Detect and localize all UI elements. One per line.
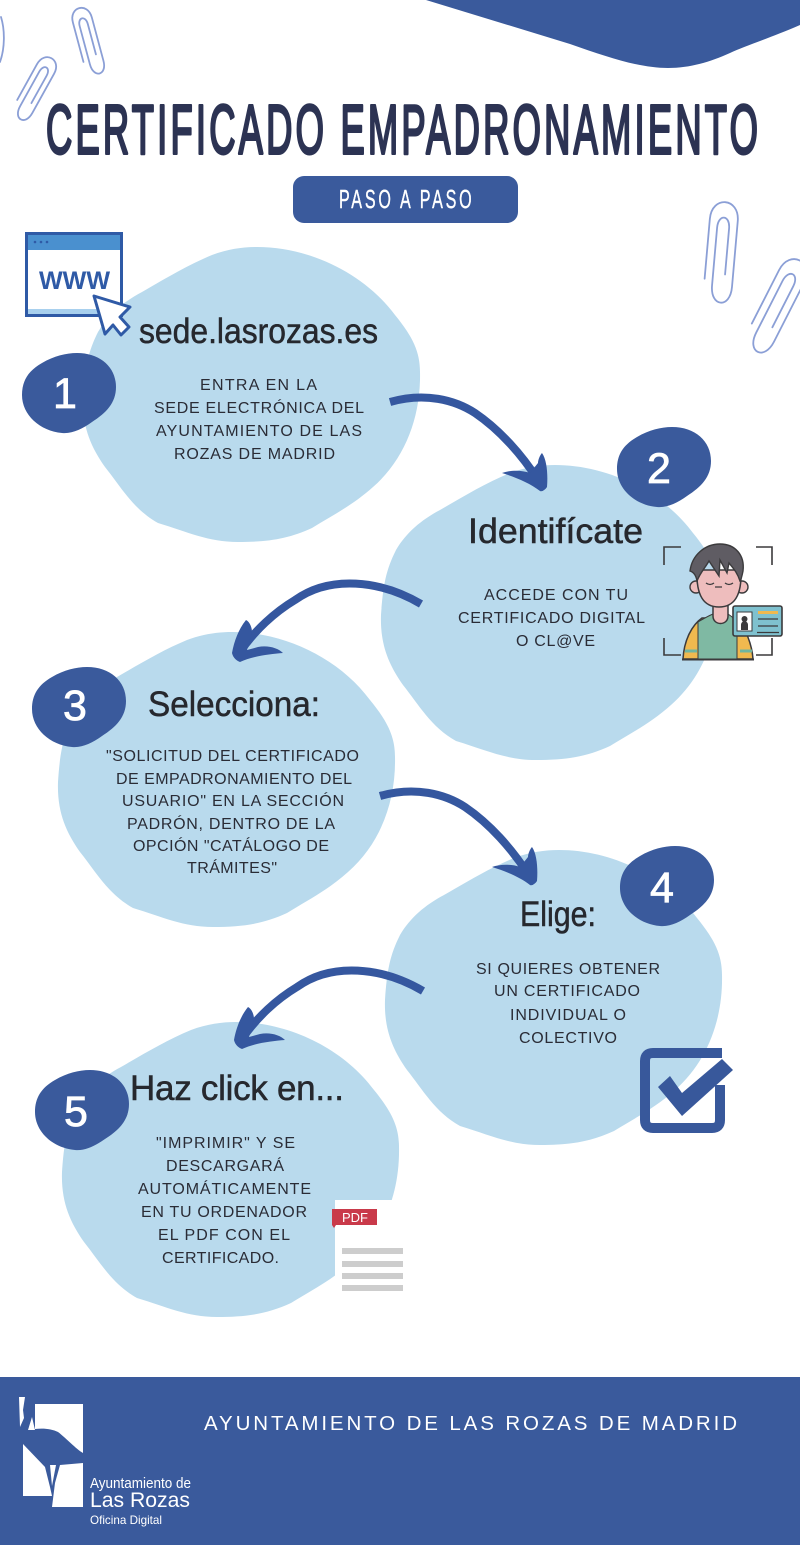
blob 1 <box>83 247 420 542</box>
heading 3: Selecciona: <box>148 685 320 724</box>
text 4: COLECTIVO <box>519 1030 617 1047</box>
logo text: Ayuntamiento de <box>90 1476 191 1492</box>
logo text: Las Rozas <box>90 1489 190 1512</box>
text 2: ACCEDE CON TU <box>484 587 628 604</box>
blob 4 <box>385 850 722 1145</box>
icon: www browser window: WWW <box>39 267 110 295</box>
text 3 <box>106 748 359 877</box>
text 1 <box>154 377 364 463</box>
text 3: PADRÓN, DENTRO DE LA <box>127 814 335 833</box>
text 1: AYUNTAMIENTO DE LAS <box>156 423 362 440</box>
heading 4: Elige: <box>520 895 596 934</box>
text 5: EL PDF CON EL <box>158 1227 290 1244</box>
logo text: Oficina Digital <box>90 1513 162 1527</box>
icon: person with ID card <box>664 544 782 660</box>
arrow 3 to 4 <box>380 792 537 885</box>
text 3: TRÁMITES" <box>187 858 277 877</box>
text 5: CERTIFICADO. <box>162 1250 279 1267</box>
blob 2 <box>381 465 718 760</box>
number 2 <box>617 427 711 507</box>
text 4: SI QUIERES OBTENER <box>476 961 660 978</box>
icon: PDF document <box>332 1200 407 1312</box>
arrow 4 to 5 <box>234 970 423 1049</box>
text 4: UN CERTIFICADO <box>494 983 640 1000</box>
text 2 <box>458 587 645 650</box>
logo: heron mark <box>19 1397 83 1507</box>
text 1: ROZAS DE MADRID <box>174 446 335 463</box>
text 3: USUARIO" EN LA SECCIÓN <box>122 791 344 810</box>
paperclips top left <box>0 6 106 123</box>
step 5 panel <box>35 1022 399 1317</box>
text 5: AUTOMÁTICAMENTE <box>138 1179 311 1198</box>
step 2 panel <box>381 427 718 760</box>
subtitle pill <box>293 176 518 223</box>
logo text <box>90 1476 191 1527</box>
number 3 <box>32 667 126 747</box>
footer band <box>0 1377 800 1545</box>
text 5: "IMPRIMIR" Y SE <box>156 1135 295 1152</box>
step 3 panel <box>32 632 395 927</box>
icon: check box <box>645 1053 733 1128</box>
icon: www browser window <box>26 234 130 335</box>
text 1: ENTRA EN LA <box>200 377 317 394</box>
step 1 panel <box>22 247 420 542</box>
text 1: SEDE ELECTRÓNICA DEL <box>154 398 364 417</box>
heading 1: sede.lasrozas.es <box>139 312 378 351</box>
number 1 <box>22 353 116 433</box>
text 3: DE EMPADRONAMIENTO DEL <box>116 771 352 788</box>
arrow 1 to 2 <box>390 398 547 491</box>
number 4: 4 <box>650 864 674 912</box>
number 4 <box>620 846 714 926</box>
blob 3 <box>58 632 395 927</box>
subtitle pill: PASO A PASO <box>339 184 472 214</box>
blob 5 <box>62 1022 399 1317</box>
heading 2: Identifícate <box>468 512 643 551</box>
text 2: O CL@VE <box>516 633 595 650</box>
text 5: EN TU ORDENADOR <box>141 1204 307 1221</box>
text 4 <box>476 961 660 1047</box>
text 5: DESCARGARÁ <box>166 1156 284 1175</box>
text 3: "SOLICITUD DEL CERTIFICADO <box>106 748 359 765</box>
step 4 panel <box>385 846 722 1145</box>
footer title: AYUNTAMIENTO DE LAS ROZAS DE MADRID <box>204 1412 737 1435</box>
number 2: 2 <box>647 445 671 493</box>
text 3: OPCIÓN "CATÁLOGO DE <box>133 836 329 855</box>
text 5 <box>138 1135 311 1267</box>
number 3: 3 <box>63 682 87 730</box>
decorative top blob <box>426 0 800 68</box>
heading 5: Haz click en... <box>130 1069 344 1108</box>
paperclips top right <box>703 201 800 356</box>
icon: PDF document: PDF <box>342 1210 368 1225</box>
number 1: 1 <box>53 370 77 418</box>
number 5: 5 <box>64 1088 88 1136</box>
number 5 <box>35 1070 129 1150</box>
text 2: CERTIFICADO DIGITAL <box>458 610 645 627</box>
title: CERTIFICADO EMPADRONAMIENTO <box>46 91 758 169</box>
text 4: INDIVIDUAL O <box>510 1007 626 1024</box>
arrow 2 to 3 <box>232 583 421 662</box>
